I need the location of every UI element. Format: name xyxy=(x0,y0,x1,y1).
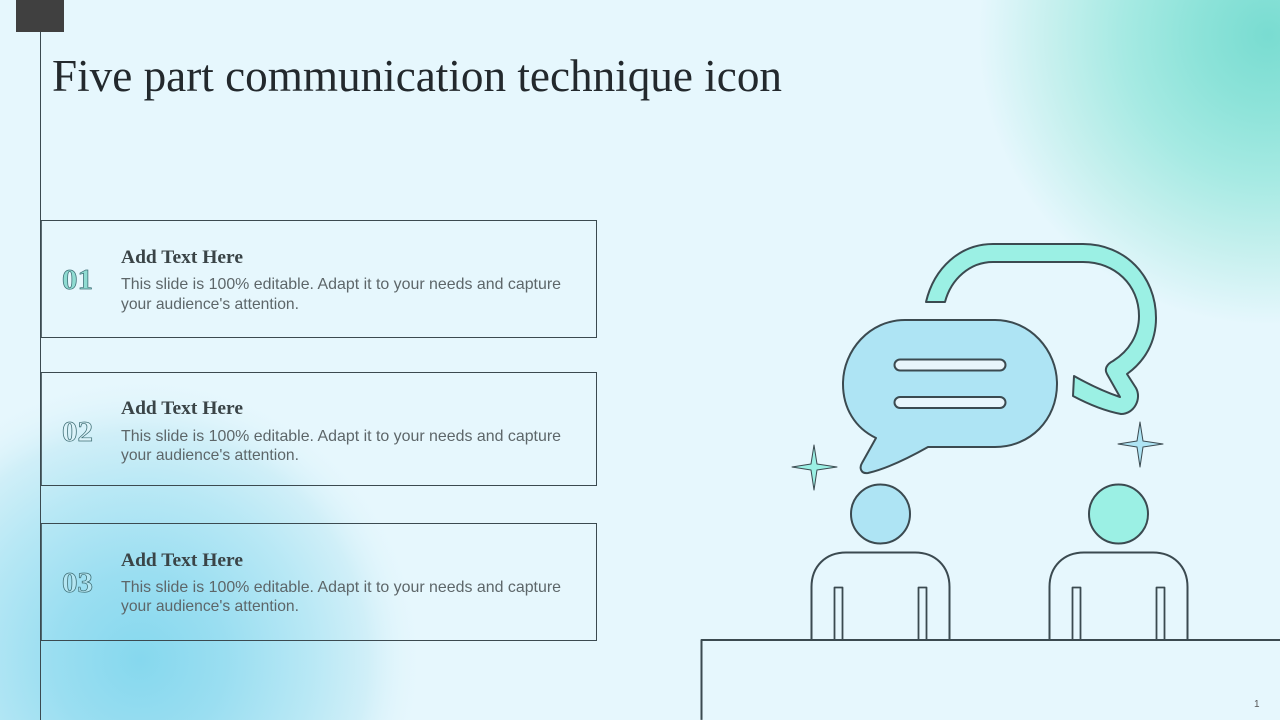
description 02: This slide is 100% editable. Adapt it to your needs and capture xyxy=(121,428,561,445)
desk xyxy=(702,640,1280,720)
description 03: your audience's attention. xyxy=(121,598,299,615)
description 02 xyxy=(121,428,561,464)
arrow xyxy=(926,244,1156,414)
heading 02: Add Text Here xyxy=(121,398,243,419)
panel: item 03 xyxy=(40,523,596,641)
number 02: 02 xyxy=(62,417,93,448)
number 03: 03 xyxy=(62,568,93,599)
description 01 xyxy=(121,276,561,313)
description 03 xyxy=(121,579,561,615)
sparkle left xyxy=(792,445,837,490)
person left xyxy=(812,484,950,640)
sparkle right xyxy=(1118,422,1163,467)
person right xyxy=(1050,484,1188,640)
bubble text line 2 xyxy=(894,397,1006,408)
panel: item 01 xyxy=(40,220,596,338)
bubble text line 1 xyxy=(894,360,1006,370)
vertical rule xyxy=(40,32,41,720)
icon: communication illustration xyxy=(702,244,1280,720)
number 01: 01 xyxy=(62,265,93,296)
speech bubble xyxy=(843,320,1057,473)
title: Five part communication technique icon xyxy=(52,51,782,101)
heading 01: Add Text Here xyxy=(121,247,243,268)
description 01: your audience's attention. xyxy=(121,296,299,313)
panel: item 02 xyxy=(40,372,596,486)
heading 03: Add Text Here xyxy=(121,550,243,571)
description 03: This slide is 100% editable. Adapt it to your needs and capture xyxy=(121,579,561,596)
top corner square xyxy=(16,0,64,32)
description 01: This slide is 100% editable. Adapt it to your needs and capture xyxy=(121,276,561,293)
description 02: your audience's attention. xyxy=(121,447,299,464)
page number: 1 xyxy=(1254,699,1260,710)
